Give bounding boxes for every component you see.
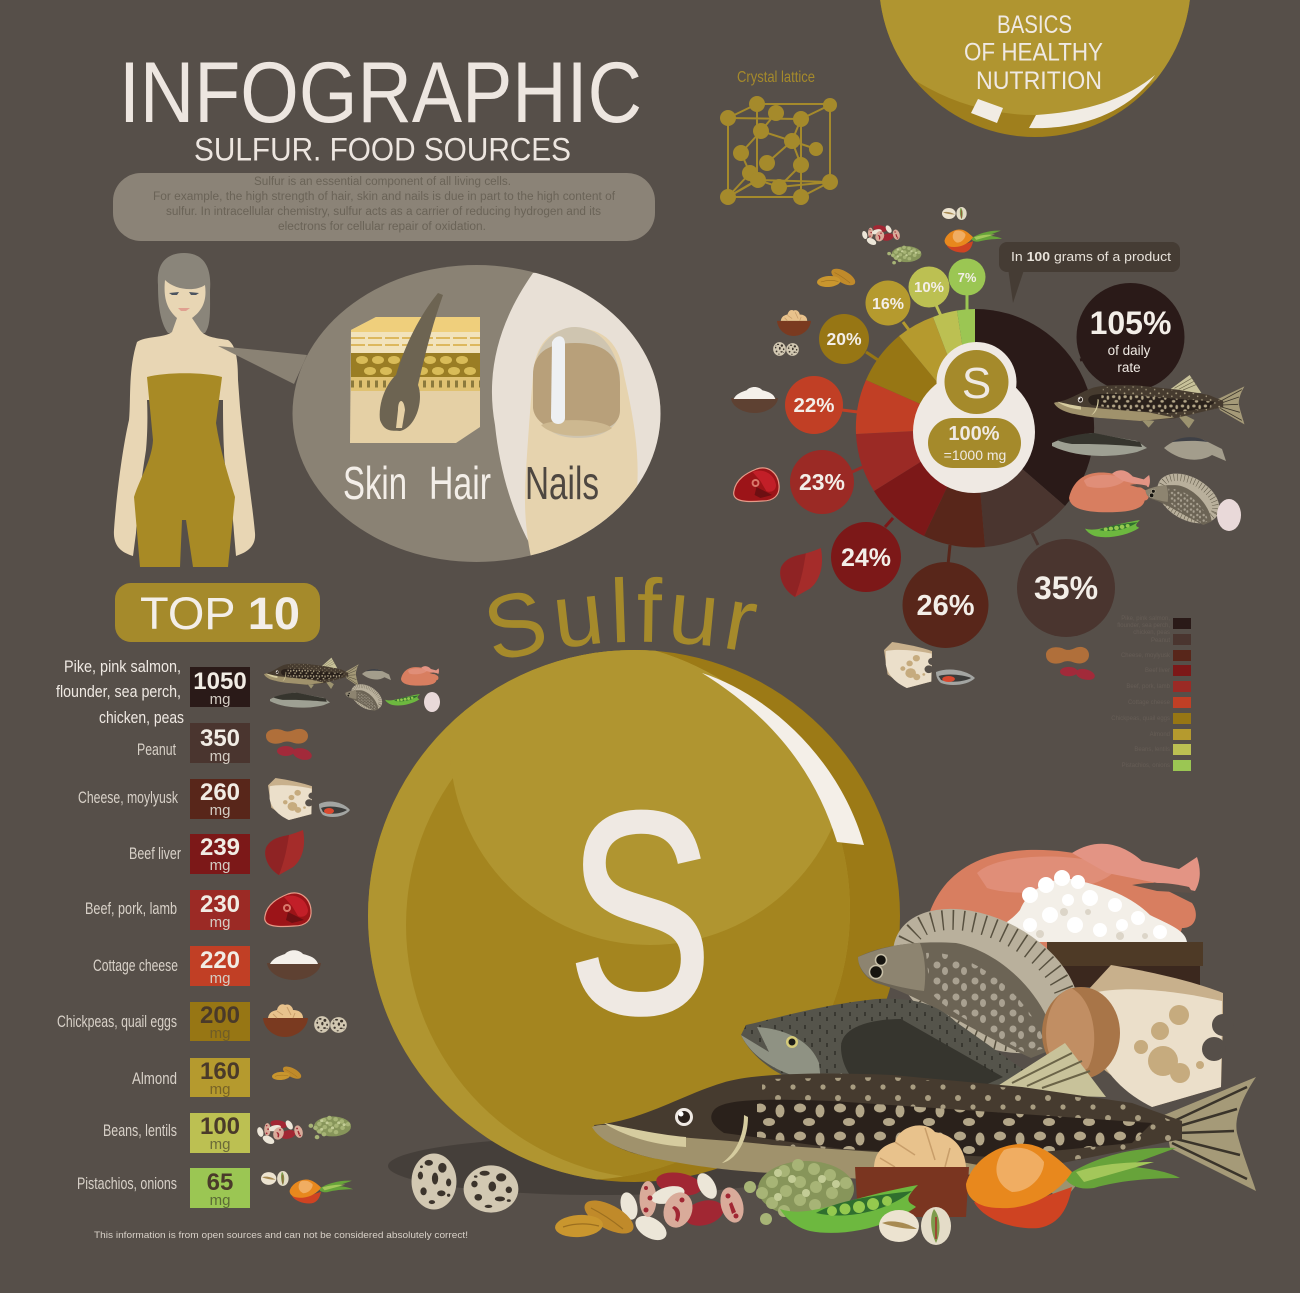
skin body bbox=[114, 280, 255, 556]
bubbles: 10% bbox=[914, 279, 944, 296]
flounder bbox=[858, 879, 1103, 1083]
legend: Beef, pork, lamb bbox=[1126, 684, 1171, 690]
row 4 bbox=[129, 830, 304, 875]
egg bbox=[1042, 987, 1120, 1079]
row 6: 220 bbox=[200, 947, 240, 974]
center: sulfur symbol bbox=[913, 342, 1035, 493]
legend: Beef liver bbox=[1145, 668, 1170, 674]
disclaimer: This information is from open sources and can not be considered absolutely correct! bbox=[94, 1230, 468, 1241]
row 9 bbox=[103, 1113, 351, 1153]
row 3 bbox=[78, 778, 350, 820]
bubbles: of daily bbox=[1108, 343, 1151, 358]
sphere letter: S bbox=[568, 752, 712, 1073]
chickpeas bowl bbox=[855, 1125, 969, 1217]
row 7 bbox=[57, 1002, 347, 1042]
row 1: Pike, pink salmon, bbox=[64, 657, 181, 676]
legend: Cheese, moylyusk bbox=[1121, 653, 1171, 659]
almonds bbox=[554, 1194, 638, 1240]
magnifier callout bbox=[218, 260, 680, 570]
row 6: Cottage cheese bbox=[93, 956, 178, 975]
callout tail bbox=[218, 346, 307, 384]
bubbles: 16% bbox=[872, 296, 904, 313]
row 1: chicken, peas bbox=[99, 708, 184, 727]
bubbles: 7% bbox=[958, 270, 977, 285]
hair follicle bbox=[380, 293, 443, 431]
row 5: Beef, pork, lamb bbox=[85, 899, 177, 918]
row 7: Chickpeas, quail eggs bbox=[57, 1012, 177, 1031]
row 7: mg bbox=[210, 1025, 230, 1042]
badge text: OF HEALTHY bbox=[964, 38, 1103, 66]
legend: Almond bbox=[1150, 732, 1170, 738]
row 5: 230 bbox=[200, 891, 240, 918]
row 5 bbox=[85, 890, 311, 931]
button: top 10 bbox=[115, 583, 320, 642]
row 2 bbox=[137, 723, 313, 765]
callout: per 100 grams: In 100 grams of a product bbox=[1011, 249, 1171, 264]
badge: basics of healthy nutrition bbox=[880, 0, 1190, 137]
pea pod bbox=[780, 1185, 918, 1233]
row 8 bbox=[132, 1058, 303, 1098]
text block: description: For example, the high strength of hair, skin and nails is due in part to the high content of bbox=[153, 191, 616, 203]
center: sulfur symbol: S bbox=[962, 359, 991, 408]
row 1: flounder, sea perch, bbox=[56, 682, 181, 701]
text block: description bbox=[113, 173, 655, 241]
legend: Peanut bbox=[1151, 638, 1170, 644]
badge text: NUTRITION bbox=[976, 67, 1102, 95]
row 6 bbox=[93, 946, 321, 987]
figure: woman bbox=[114, 253, 255, 567]
legend: Cottage cheese bbox=[1128, 700, 1171, 706]
bubbles: 35% bbox=[1034, 570, 1098, 606]
row 6: mg bbox=[210, 970, 230, 987]
row 9: Beans, lentils bbox=[103, 1121, 177, 1140]
cottage cheese bbox=[982, 870, 1203, 987]
subtitle: SULFUR. FOOD SOURCES bbox=[194, 132, 571, 168]
badge text: BASICS bbox=[997, 11, 1072, 39]
row 8: mg bbox=[210, 1081, 230, 1098]
sphere highlight bbox=[702, 673, 864, 845]
bubbles: 24% bbox=[841, 544, 891, 572]
connectors bbox=[842, 295, 1090, 565]
quail eggs bbox=[412, 1153, 518, 1213]
row 10: Pistachios, onions bbox=[77, 1174, 177, 1193]
row 5: mg bbox=[210, 914, 230, 931]
legend: Pistachios, onions bbox=[1122, 763, 1170, 769]
row 1 bbox=[56, 657, 440, 727]
row 10: mg bbox=[210, 1192, 230, 1209]
row 1: 1050 bbox=[193, 668, 247, 695]
dress bbox=[134, 373, 235, 567]
cheese bbox=[1088, 965, 1234, 1107]
legend: Pike, pink salmon, bbox=[1121, 616, 1170, 622]
bubbles bbox=[785, 258, 1184, 648]
bubbles: 105% bbox=[1090, 305, 1171, 341]
bubbles: 20% bbox=[826, 329, 862, 349]
bubbles: 26% bbox=[916, 590, 975, 622]
bubbles: 23% bbox=[799, 469, 845, 495]
salmon bbox=[741, 999, 1031, 1087]
row 3: mg bbox=[210, 802, 230, 819]
legend: flounder, sea perch, bbox=[1117, 623, 1170, 629]
bubbles: 22% bbox=[793, 394, 835, 417]
center: sulfur symbol: =1000 mg bbox=[944, 447, 1006, 463]
row 9: mg bbox=[210, 1136, 230, 1153]
chart food icons bbox=[731, 207, 1244, 688]
row 7: 200 bbox=[200, 1002, 240, 1029]
crystal lattice: Crystal lattice bbox=[737, 69, 815, 86]
nail panel bbox=[492, 272, 660, 554]
row 4: mg bbox=[210, 857, 230, 874]
sulfur sphere bbox=[368, 650, 900, 1182]
row 2: mg bbox=[210, 748, 230, 765]
chicken bbox=[927, 844, 1200, 961]
title: INFOGRAPHIC bbox=[119, 45, 642, 141]
row 1: mg bbox=[210, 691, 230, 708]
top 10 list bbox=[56, 657, 440, 1209]
legend bbox=[1111, 616, 1191, 771]
text block: description: sulfur. In intracellular chemistry, sulfur acts as a carrier of reducing hydrogen and its bbox=[166, 206, 601, 218]
callout: per 100 grams bbox=[999, 242, 1180, 303]
magnifier callout: Hair bbox=[429, 457, 491, 509]
row 2: Peanut bbox=[137, 740, 176, 759]
center: sulfur symbol: 100% bbox=[948, 423, 1000, 445]
text block: description: electrons for cellular repair of oxidation. bbox=[278, 221, 486, 233]
text block: description: Sulfur is an essential component of all living cells. bbox=[254, 176, 511, 188]
badge text bbox=[964, 11, 1103, 95]
legend: Chickpeas, quail eggs bbox=[1111, 716, 1170, 722]
heading: sulfur curved bbox=[489, 576, 758, 658]
pie chart: share of daily rate bbox=[731, 207, 1244, 688]
bubbles: rate bbox=[1117, 360, 1141, 375]
legend: Beans, lentils bbox=[1134, 747, 1170, 753]
crystal lattice bbox=[720, 69, 838, 205]
pike bbox=[592, 1043, 1256, 1203]
nail shine bbox=[551, 336, 565, 424]
skin section diagram bbox=[350, 293, 480, 443]
badge highlight bbox=[971, 75, 1155, 128]
row 3: Cheese, moylyusk bbox=[78, 788, 178, 807]
pistachios bbox=[879, 1207, 951, 1245]
hair bbox=[158, 253, 210, 333]
row 4: 239 bbox=[200, 834, 240, 861]
legend: chicken, peas bbox=[1133, 630, 1170, 636]
row 4: Beef liver bbox=[129, 844, 181, 863]
onion bbox=[966, 1144, 1180, 1228]
pie slices bbox=[856, 309, 1094, 547]
eyes and lips bbox=[169, 292, 199, 295]
magnifier callout: Nails bbox=[525, 457, 599, 509]
finger bbox=[525, 328, 638, 570]
row 10 bbox=[77, 1168, 353, 1209]
row 8: Almond bbox=[132, 1069, 177, 1088]
heading: sulfur curved: Sulfur bbox=[489, 576, 758, 658]
button: top 10: TOP 10 bbox=[140, 588, 300, 639]
row 10: 65 bbox=[207, 1169, 233, 1196]
lentils bbox=[744, 1159, 854, 1225]
nail bbox=[535, 327, 620, 438]
row 9: 100 bbox=[200, 1113, 240, 1140]
food still life bbox=[412, 844, 1256, 1245]
row 8: 160 bbox=[200, 1058, 240, 1085]
labels: Skin bbox=[343, 457, 407, 509]
sphere shadow bbox=[388, 1137, 812, 1195]
row 2: 350 bbox=[200, 725, 240, 752]
beans bbox=[618, 1169, 747, 1245]
row 3: 260 bbox=[200, 779, 240, 806]
